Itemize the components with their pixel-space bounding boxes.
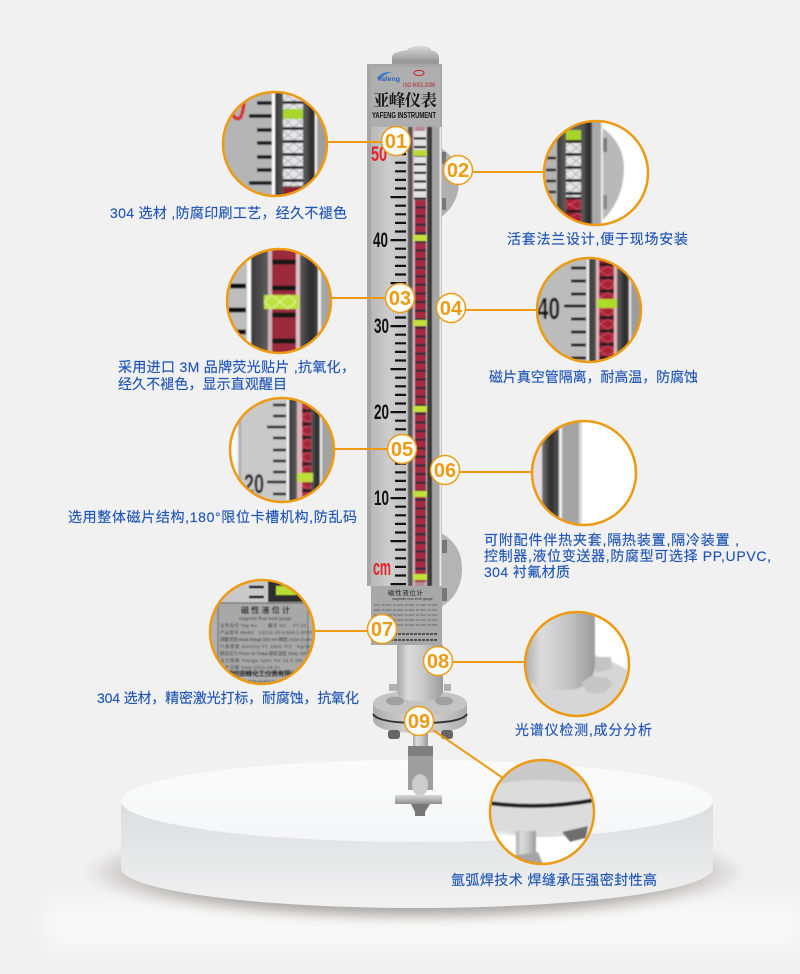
number badge 06: [430, 456, 460, 484]
callout 09: argon arc welding: [433, 730, 657, 888]
magnifier 05: [228, 396, 336, 504]
magnifier 07: [208, 578, 316, 686]
number badge 09: 09: [408, 711, 430, 733]
caption 03: 采用进口 3M 品牌荧光贴片 ,抗氧化，: [118, 359, 355, 375]
number badge 03: 03: [389, 288, 411, 310]
callout 06: accessories: [459, 420, 771, 580]
logo plate: 亚峰仪表: [373, 90, 438, 110]
nameplate: magnetic float level gauge: [392, 597, 433, 601]
magnifier 07: 介质密度 Density P1 1000 /P2 Kg/m3: [220, 643, 312, 650]
caption 04: 磁片真空管隔离，耐高温，防腐蚀: [489, 369, 698, 385]
magnifier 07: 潍坊亚峰化工仪表有限公司: [226, 669, 304, 678]
magnifier 05: 20: [244, 469, 264, 499]
magnifier 07: 产品型号 Model UZ211-25-0-500-1.0P25: [220, 629, 312, 636]
number badge 01: 01: [385, 131, 407, 153]
number badge 03: [386, 284, 414, 312]
magnifier 07: 测量范围 Meas.Range 500 mm 精度 Accur ±1mm: [220, 636, 312, 643]
number badge 08: [424, 646, 452, 676]
caption 06: 可附配件伴热夹套,隔热装置,隔冷装置 ,: [484, 532, 739, 548]
caption 08: 光谱仪检测,成分分析: [515, 722, 652, 738]
scale panel: [371, 127, 408, 586]
magnifier 08: [523, 610, 631, 718]
logo plate: YAFENG INSTRUMENT: [372, 111, 436, 120]
number badge 04: 04: [440, 298, 463, 320]
display platform: [48, 760, 800, 950]
caption 06: 304 衬氟材质: [484, 564, 570, 580]
logo plate: Yafeng: [377, 77, 400, 83]
scale panel: 40: [373, 229, 388, 252]
magnifier 04: 40: [537, 291, 560, 326]
caption 06: 控制器,液位变送器,防腐型可选择 PP,UPVC,: [484, 548, 771, 564]
level gauge instrument: [367, 46, 467, 816]
magnifier 07: 生产日期 Date 2015.09.01: [220, 664, 280, 671]
number badge 06: 06: [434, 460, 456, 482]
gauge housing: [367, 64, 442, 586]
scale panel: 10: [374, 487, 389, 510]
magnifier 03: [225, 247, 333, 355]
caption 03: 经久不褪色，显示直观醒目: [118, 376, 287, 392]
lower stem: [397, 645, 443, 702]
magnifier 07: 法兰规格 Flange spec PN 16.0 DN 25: [220, 657, 310, 664]
callout 05: one-piece magnetic structure: [68, 396, 389, 525]
magnifier 07: 磁性液位计: [241, 605, 290, 615]
process flange: [373, 684, 467, 733]
magnifier 01: [220, 90, 330, 201]
logo plate: [371, 67, 440, 127]
magnifier 04: [535, 256, 643, 364]
magnifier 07: Tel 0536-8187271: [240, 679, 277, 684]
side flange lower: [441, 533, 462, 607]
number badge 02: [444, 156, 472, 184]
logo plate: ISO 9001:2008: [403, 83, 436, 89]
callout 01: 304 material: [110, 90, 383, 221]
caption 02: 活套法兰设计,便于现场安装: [507, 231, 688, 247]
callout 03: 3M fluorescent sticker: [118, 247, 387, 392]
number badge 09: [404, 706, 434, 736]
callout 08: spectrometer inspection: [451, 610, 652, 738]
number badge 07: [368, 614, 396, 644]
nameplate: [371, 586, 442, 645]
number badge 08: 08: [427, 651, 449, 673]
number badge 05: [388, 434, 416, 464]
scale panel: 50: [371, 143, 387, 166]
magnifier 09: [488, 758, 596, 866]
number badge 07: 07: [371, 619, 393, 641]
caption 06: [484, 532, 771, 580]
magnifier 07: magnetic float level gauge: [239, 616, 292, 621]
caption 03: [118, 359, 355, 392]
number badge 04: [436, 294, 466, 322]
scale panel: cm: [373, 555, 391, 580]
callout 07: laser marked nameplate: [97, 578, 369, 706]
drain valve: [388, 730, 453, 816]
caption 09: 氩弧焊技术 焊缝承压强密封性高: [451, 872, 657, 888]
magnifier 07: 业务位号 Tag No. 编号 NO. P7.23: [220, 622, 306, 629]
number badge 05: 05: [391, 439, 413, 461]
magnifier 06: [530, 420, 638, 526]
number badge 02: 02: [447, 160, 469, 182]
top cap: [392, 46, 439, 65]
caption 01: 304 选材 ,防腐印刷工艺，经久不褪色: [110, 205, 347, 221]
magnifier 07: 额定压力 Press 16 CMpa 额定温度 Temp 100 ℃: [220, 650, 312, 657]
callout 04: vacuum tube isolation: [465, 256, 698, 385]
scale panel: 30: [374, 315, 389, 338]
scale panel: 20: [374, 401, 389, 424]
indicator tube: [408, 127, 442, 586]
nameplate: 磁性液位计: [388, 588, 424, 597]
magnifier 02: [540, 118, 652, 230]
caption 07: 304 选材，精密激光打标，耐腐蚀，抗氧化: [97, 690, 359, 706]
number badge 01: [382, 126, 410, 156]
side flange upper: [441, 148, 459, 217]
callout 02: loose flange: [472, 118, 688, 247]
caption 05: 选用整体磁片结构,180°限位卡槽机构,防乱码: [68, 509, 357, 525]
